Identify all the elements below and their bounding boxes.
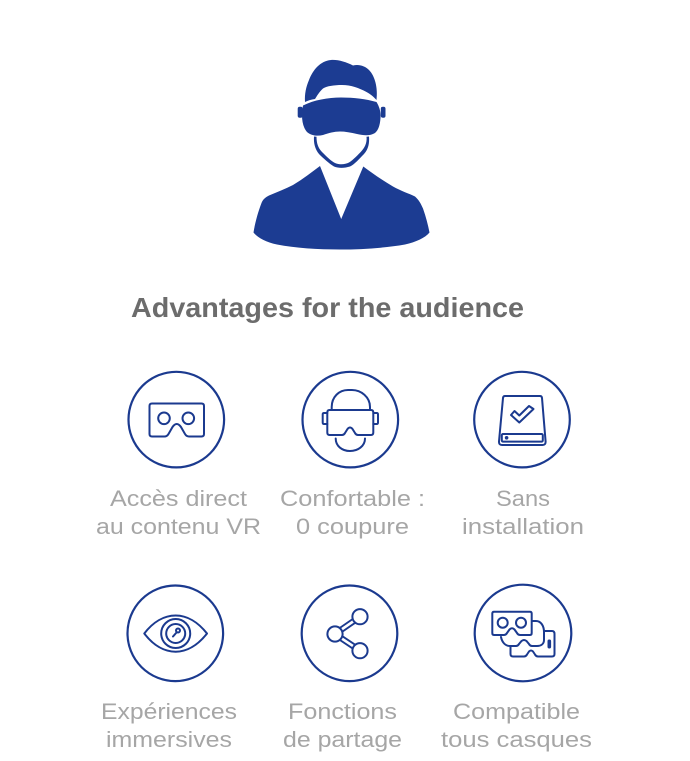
item: direct access: [96, 372, 261, 539]
icon: stacked VR viewers: [475, 585, 571, 681]
label line 2: tous casques: [441, 727, 592, 752]
item: compatible with all headsets: [441, 585, 592, 752]
label: Compatible: [453, 699, 580, 724]
item: no installation: [462, 372, 584, 539]
label line 2: 0 coupure: [296, 514, 409, 539]
heading: Advantages for the audience: [131, 292, 524, 323]
label: Sans: [496, 486, 550, 511]
item: immersive experiences: [101, 586, 237, 752]
label line 2: installation: [462, 514, 584, 539]
label line 2: de partage: [283, 727, 402, 752]
label: Confortable :: [280, 486, 425, 511]
label: Expériences: [101, 699, 237, 724]
icon: share nodes: [302, 586, 397, 681]
label: Fonctions: [288, 699, 397, 724]
icon: person wearing VR headset: [254, 60, 430, 249]
label line 2: immersives: [106, 727, 232, 752]
icon: VR cardboard viewer: [128, 372, 224, 467]
label: Accès direct: [110, 486, 247, 511]
icon: head with goggles: [302, 372, 398, 467]
item: comfortable: [280, 372, 425, 539]
icon: hard drive with check mark: [474, 372, 570, 467]
icon: eye: [128, 586, 223, 681]
item: sharing functions: [283, 586, 402, 752]
label line 2: au contenu VR: [96, 514, 261, 539]
